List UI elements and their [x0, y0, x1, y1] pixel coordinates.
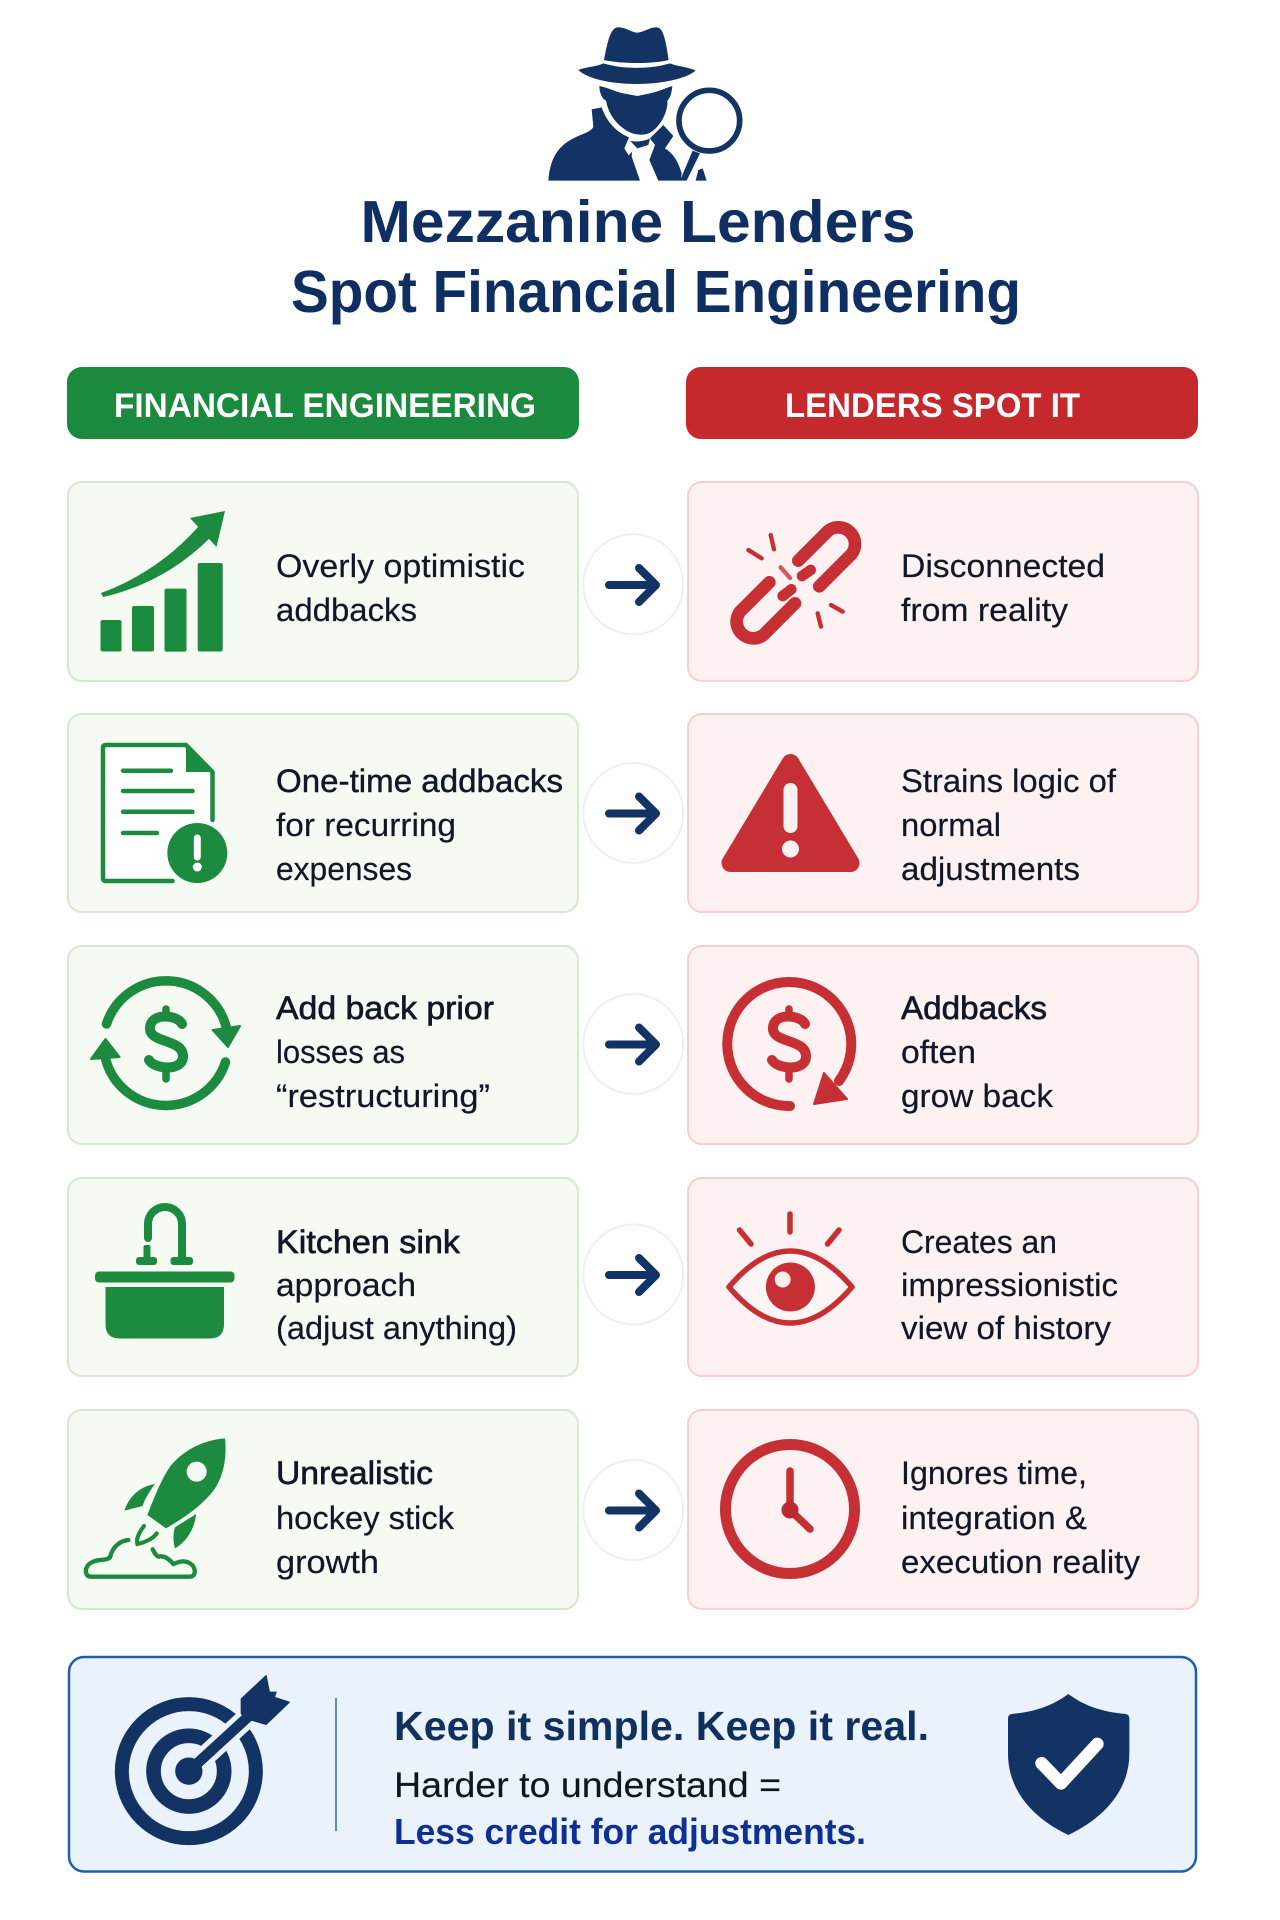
title: Spot Financial Engineering	[291, 259, 1021, 325]
arrow: row 3	[583, 994, 683, 1094]
text: one-time addbacks: expenses	[276, 851, 412, 887]
text: addbacks often grow back	[901, 990, 1054, 1114]
text: addbacks often grow back: Addbacks	[901, 990, 1047, 1026]
arrow: row 2	[583, 763, 683, 863]
icon: dollar with return arrow	[727, 982, 851, 1106]
text: one-time addbacks: for recurring	[276, 807, 456, 843]
divider	[335, 1698, 337, 1831]
text: kitchen sink approach: Kitchen sink	[276, 1224, 461, 1260]
text: one-time addbacks: One-time addbacks	[276, 763, 563, 799]
text: add back prior losses: losses as	[276, 1034, 405, 1070]
text: disconnected from reality	[901, 548, 1105, 628]
panel: hockey stick growth	[68, 1410, 578, 1609]
icon: warning triangle	[730, 763, 850, 863]
icon: broken chain link	[737, 527, 855, 638]
heading: financial engineering	[67, 367, 579, 439]
text: one-time addbacks	[276, 763, 563, 887]
text: strains logic: adjustments	[901, 851, 1080, 887]
text: ignores time: execution reality	[901, 1544, 1140, 1580]
text: add back prior losses: “restructuring”	[276, 1078, 490, 1114]
text: impressionistic view	[901, 1224, 1118, 1346]
text: hockey stick growth: growth	[276, 1544, 379, 1580]
panel: overly optimistic addbacks	[68, 482, 578, 681]
text: overly optimistic addbacks	[276, 548, 525, 628]
text: strains logic: Strains logic of	[901, 763, 1116, 799]
text: hockey stick growth: Unrealistic	[276, 1455, 433, 1491]
text: kitchen sink approach: approach	[276, 1267, 416, 1303]
text: ignores time	[901, 1455, 1140, 1580]
panel: kitchen sink approach	[68, 1178, 578, 1376]
icon: growth bar chart	[100, 511, 225, 652]
icon: dollar in circular arrows	[91, 981, 240, 1105]
panel: impressionistic view	[688, 1178, 1198, 1376]
text: ignores time: Ignores time,	[901, 1455, 1087, 1491]
arrow: row 1	[583, 534, 683, 634]
text: kitchen sink approach: (adjust anything)	[276, 1310, 517, 1346]
title	[291, 189, 1021, 325]
icon: shield with check	[1008, 1694, 1129, 1835]
text: keep it simple	[394, 1703, 929, 1852]
text: overly optimistic addbacks: Overly optimistic	[276, 548, 525, 584]
heading: lenders spot it: LENDERS SPOT IT	[785, 387, 1080, 425]
text: keep it simple: Harder to understand =	[394, 1766, 781, 1805]
panel: ignores time	[688, 1410, 1198, 1609]
text: impressionistic view: impressionistic	[901, 1267, 1118, 1303]
panel: addbacks often grow back	[688, 946, 1198, 1144]
text: hockey stick growth: hockey stick	[276, 1500, 455, 1536]
panel: add back prior losses	[68, 946, 578, 1144]
text: impressionistic view: view of history	[901, 1310, 1111, 1346]
text: keep it simple: Keep it simple. Keep it real.	[394, 1703, 929, 1749]
text: kitchen sink approach	[276, 1224, 517, 1346]
icon: eye	[729, 1214, 852, 1323]
text: ignores time: integration &	[901, 1500, 1087, 1536]
text: overly optimistic addbacks: addbacks	[276, 592, 417, 628]
arrow: row 4	[583, 1224, 683, 1324]
title: Mezzanine Lenders	[360, 189, 916, 255]
text: add back prior losses	[276, 990, 494, 1114]
icon: target with arrow	[122, 1675, 289, 1838]
text: keep it simple: Less credit for adjustments.	[394, 1811, 866, 1852]
icon: kitchen sink	[95, 1207, 234, 1338]
panel: disconnected from reality	[688, 482, 1198, 681]
panel: strains logic	[688, 714, 1198, 912]
heading: financial engineering: FINANCIAL ENGINEERING	[114, 387, 536, 425]
text: strains logic: normal	[901, 807, 1001, 843]
icon: detective with magnifying glass	[548, 27, 740, 181]
text: disconnected from reality: from reality	[901, 592, 1068, 628]
text: hockey stick growth	[276, 1455, 455, 1580]
icon: clock	[726, 1444, 854, 1574]
callout: keep it simple	[69, 1657, 1196, 1872]
text: disconnected from reality: Disconnected	[901, 548, 1105, 584]
arrow: row 5	[583, 1460, 683, 1560]
icon: rocket launch	[86, 1438, 226, 1577]
text: add back prior losses: Add back prior	[276, 990, 494, 1026]
panel: one-time addbacks	[68, 714, 578, 912]
text: strains logic	[901, 763, 1116, 887]
text: addbacks often grow back: often	[901, 1034, 976, 1070]
heading: lenders spot it	[686, 367, 1198, 439]
text: impressionistic view: Creates an	[901, 1224, 1057, 1260]
text: addbacks often grow back: grow back	[901, 1078, 1054, 1114]
icon: document with alert	[103, 744, 227, 883]
